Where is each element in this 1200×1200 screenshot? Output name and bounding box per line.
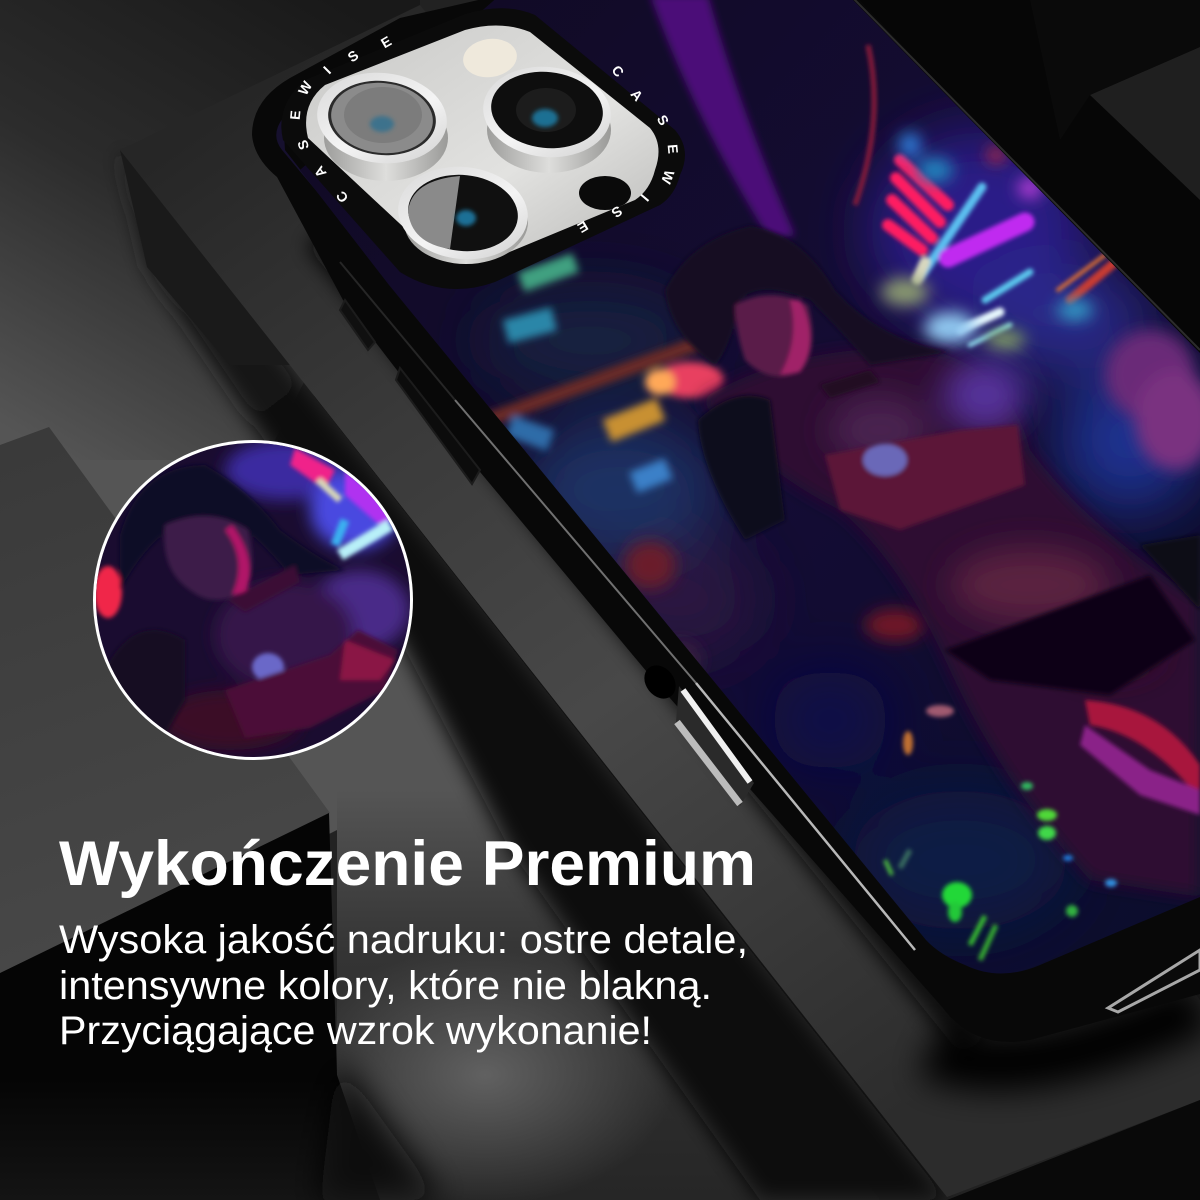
CASEWISE lettering: E xyxy=(575,218,591,236)
CASEWISE lettering: S xyxy=(609,203,625,221)
CASEWISE lettering: W xyxy=(295,78,316,98)
body text: intensywne kolory, które nie blakną. xyxy=(59,964,712,1008)
microphone hole xyxy=(579,176,631,210)
CASEWISE lettering: S xyxy=(654,112,672,128)
lens top left xyxy=(313,66,451,181)
CASEWISE lettering: A xyxy=(628,86,646,104)
lens top right xyxy=(479,61,615,173)
side button long xyxy=(396,368,480,484)
flash xyxy=(461,35,519,81)
abstract figure colour masses xyxy=(700,349,1200,897)
CASEWISE lettering: E xyxy=(287,110,303,120)
island ring xyxy=(281,8,685,289)
lens bottom xyxy=(394,160,532,266)
side button silver xyxy=(676,686,754,806)
CASEWISE lettering: C xyxy=(609,62,627,80)
heading: Wykończenie Premium xyxy=(59,829,756,899)
body text: Wysoka jakość nadruku: ostre detale, xyxy=(59,918,748,962)
button notch xyxy=(638,659,682,705)
camera island xyxy=(281,8,685,289)
CASEWISE lettering: A xyxy=(311,163,329,181)
CASEWISE lettering: S xyxy=(294,138,312,152)
CASEWISE lettering: I xyxy=(320,63,334,77)
CASEWISE lettering: E xyxy=(665,144,681,154)
CASEWISE lettering: I xyxy=(638,191,652,205)
CASEWISE lettering: C xyxy=(333,188,351,206)
CASEWISE lettering: W xyxy=(658,168,678,187)
abstract figure hair and shade xyxy=(665,226,1200,815)
CASEWISE lettering xyxy=(287,33,681,236)
charging port xyxy=(1108,950,1200,1012)
glossy edge highlights xyxy=(340,0,1200,950)
inset circle: print detail xyxy=(90,440,420,760)
island silver plate xyxy=(306,25,659,262)
CASEWISE lettering: E xyxy=(378,33,394,51)
neon signs xyxy=(888,160,1120,345)
water reflections xyxy=(885,705,1117,960)
CASEWISE lettering: S xyxy=(345,47,361,65)
glass sliver beside island xyxy=(276,118,395,285)
case body xyxy=(252,0,1200,1042)
side button small xyxy=(340,300,375,350)
printed artwork xyxy=(280,0,1200,990)
phone case xyxy=(252,0,1200,1042)
neon pole xyxy=(650,0,795,240)
body text xyxy=(59,918,748,1053)
body text: Przyciągające wzrok wykonanie! xyxy=(59,1009,652,1053)
